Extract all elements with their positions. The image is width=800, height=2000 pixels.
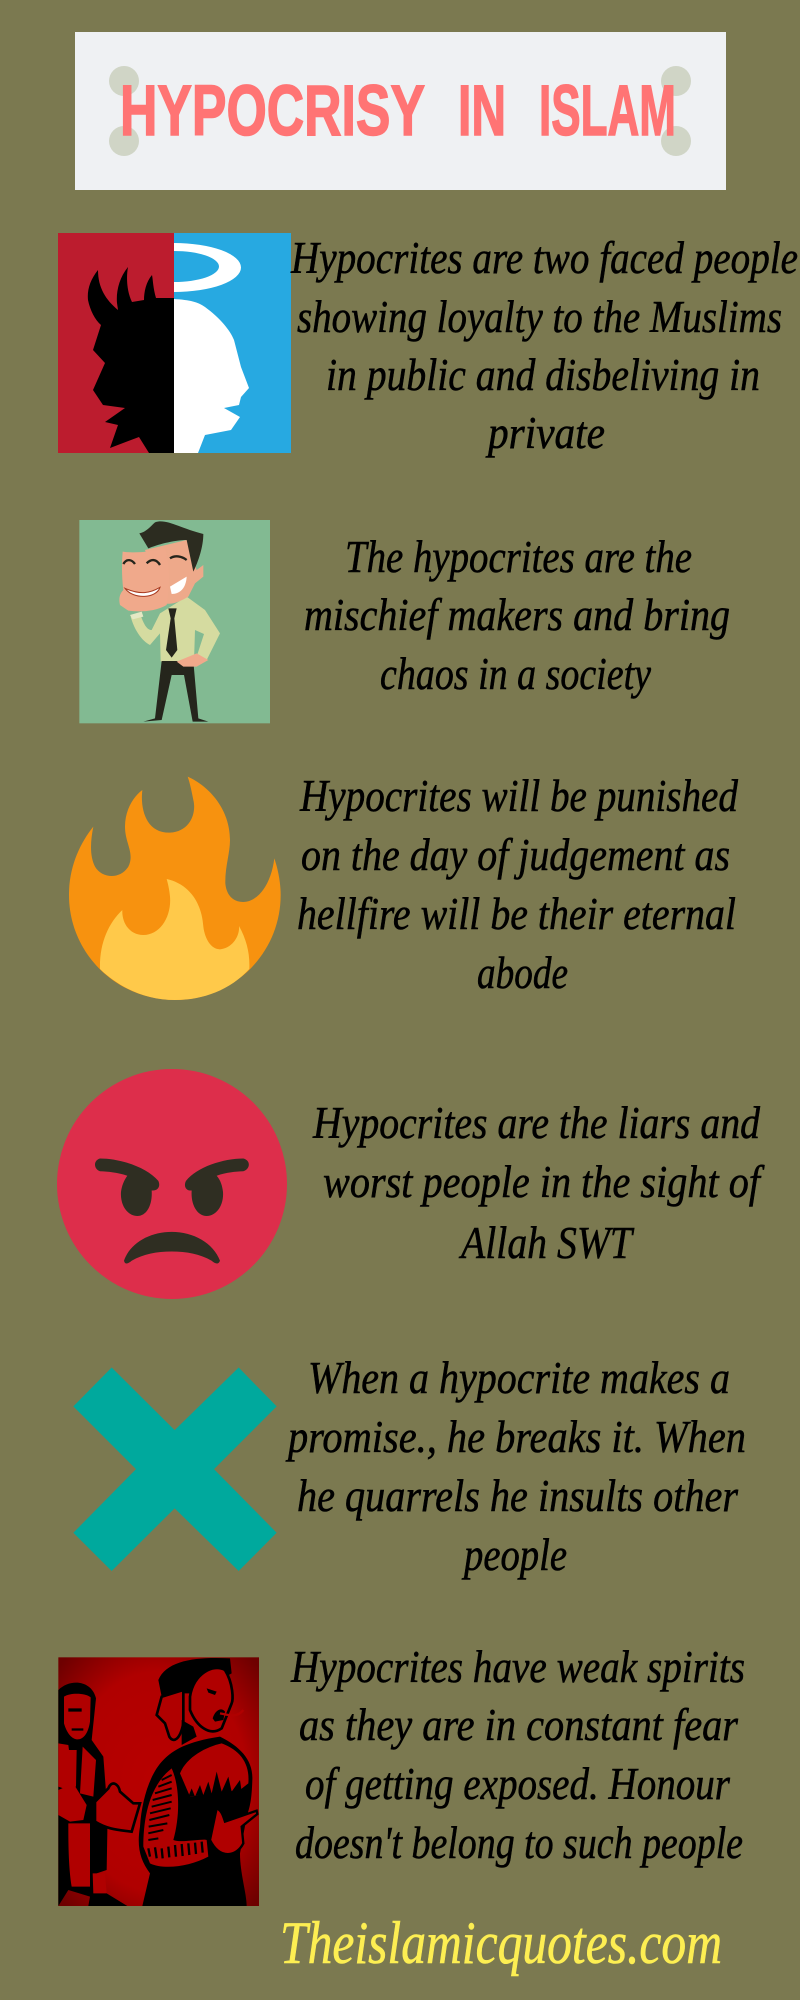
panel: two faced: [58, 233, 798, 458]
text block: When a hypocrite makes a: [308, 1353, 730, 1403]
text block: Hypocrites will be punished: [299, 771, 738, 821]
text block: on the day of judgement as: [301, 830, 730, 880]
text block: promise., he breaks it. When: [285, 1412, 746, 1462]
panel: liars: [57, 1069, 765, 1299]
icon: fire: [69, 777, 281, 1000]
right man: [95, 1658, 257, 1906]
text block: [290, 1642, 745, 1868]
text block: Allah SWT: [458, 1218, 635, 1268]
title panel: [75, 32, 726, 190]
text block: [312, 1098, 765, 1268]
title: IN: [458, 72, 506, 151]
panel: weak spirits: [58, 1642, 745, 1906]
text block: [304, 532, 730, 699]
text block: of getting exposed. Honour: [305, 1759, 730, 1809]
icon: man holding a mask: [79, 520, 270, 723]
panel: broken promises: [73, 1353, 746, 1580]
left man: [58, 1683, 127, 1906]
text block: hellfire will be their eternal: [297, 889, 736, 939]
icon: angry face: [57, 1069, 287, 1299]
text block: Hypocrites have weak spirits: [290, 1642, 745, 1692]
title: HYPOCRISY: [120, 72, 425, 151]
text block: [297, 771, 738, 998]
text block: [290, 233, 798, 458]
text block: he quarrels he insults other: [297, 1471, 738, 1521]
decorative pins: [109, 66, 691, 156]
text block: chaos in a society: [380, 649, 651, 699]
text block: private: [485, 408, 605, 458]
icon: teal cross: [73, 1367, 277, 1571]
text block: mischief makers and bring: [304, 590, 730, 640]
text block: abode: [477, 948, 568, 998]
icon: devil and angel head: [58, 233, 291, 453]
title: ISLAM: [539, 72, 676, 151]
panel: mischief makers: [79, 520, 730, 723]
icon: two faced man crossing fingers: [58, 1657, 259, 1906]
text block: [285, 1353, 746, 1580]
text block: worst people in the sight of: [323, 1157, 765, 1207]
text block: people: [461, 1530, 567, 1580]
text block: as they are in constant fear: [299, 1700, 738, 1750]
text block: The hypocrites are the: [345, 532, 692, 582]
panel: hellfire: [69, 771, 738, 1000]
footer website: Theislamicquotes.com: [280, 1910, 722, 1976]
